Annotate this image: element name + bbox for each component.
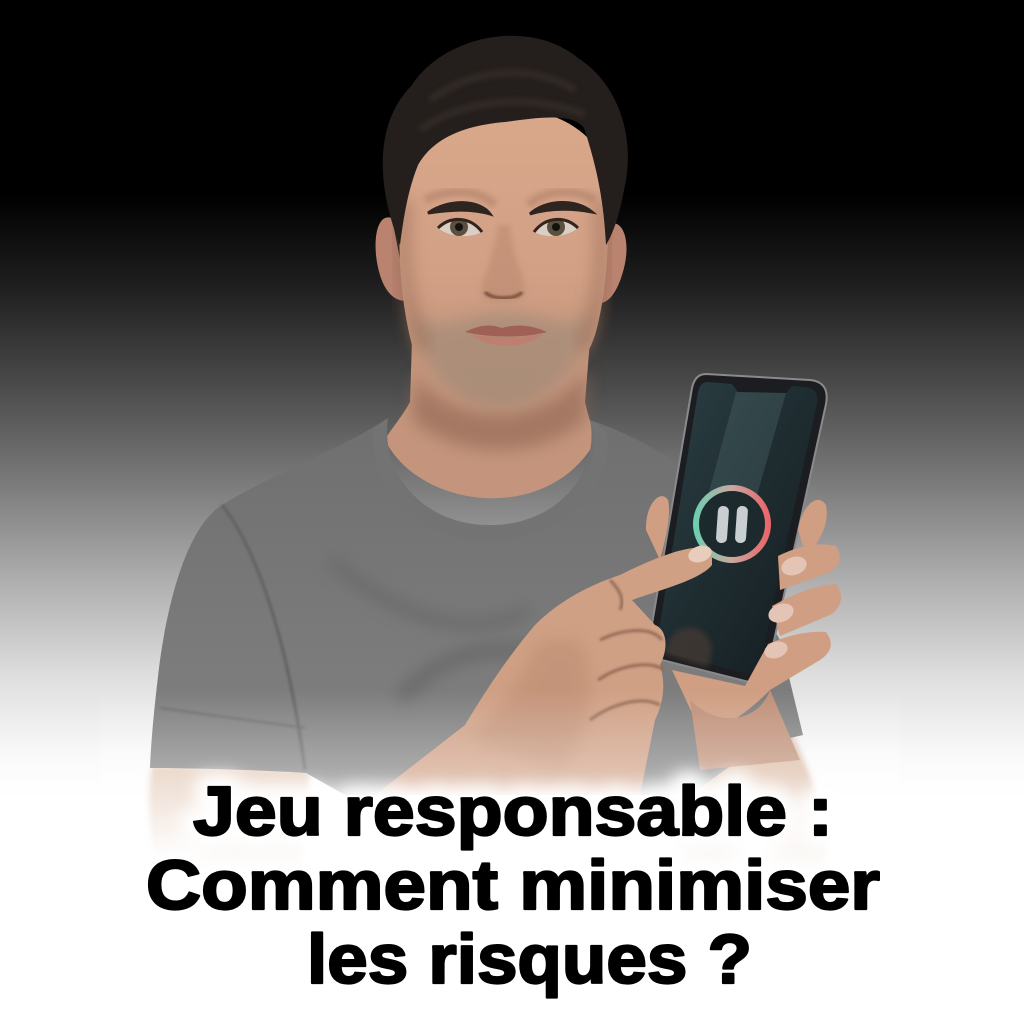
neck (385, 340, 596, 498)
mouth (465, 326, 547, 346)
title glow: Comment minimiser (146, 846, 880, 924)
man portrait (100, 36, 900, 990)
cheek shading and beard (403, 192, 602, 408)
phone (648, 374, 827, 682)
eyebrows (428, 202, 592, 214)
screen reflection (700, 392, 786, 548)
pause ring (696, 488, 768, 560)
holding hand (646, 496, 841, 770)
title: Comment minimiser (146, 846, 880, 924)
pause icon (716, 506, 748, 543)
title (146, 772, 880, 998)
finger reflection (664, 628, 712, 668)
t-shirt (150, 418, 803, 795)
title: les risques ? (307, 920, 752, 998)
eyes (438, 218, 578, 236)
title glow (146, 772, 880, 998)
neck shadow (412, 370, 588, 450)
arms (149, 730, 827, 880)
title glow: Jeu responsable : (193, 772, 833, 850)
title glow: les risques ? (307, 920, 752, 998)
ears (376, 217, 627, 303)
face (399, 109, 608, 408)
phone screen (657, 382, 818, 674)
fingernails (762, 553, 809, 661)
hair (383, 36, 628, 245)
pointing hand (375, 543, 714, 795)
lower body fade (100, 690, 900, 990)
hair highlights (420, 73, 585, 130)
title: Jeu responsable : (193, 772, 833, 850)
